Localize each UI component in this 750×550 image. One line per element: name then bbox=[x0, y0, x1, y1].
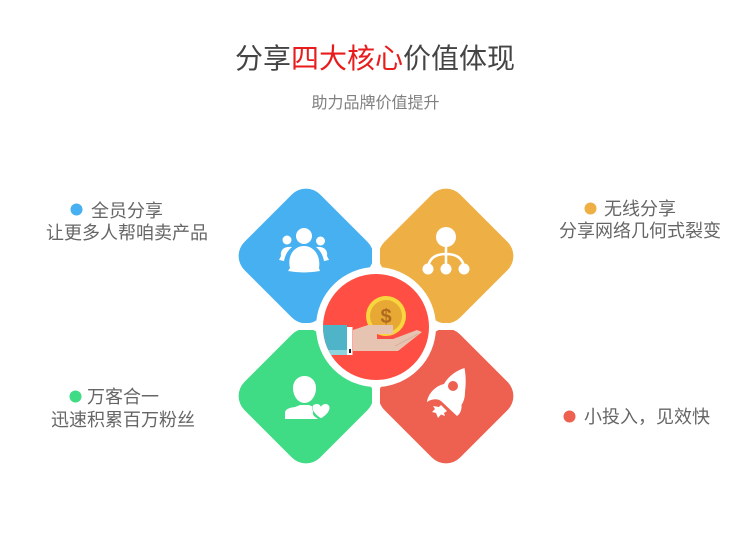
label: wireless sharing bbox=[559, 199, 721, 241]
label: fans bbox=[51, 387, 195, 430]
panel: blue diamond bbox=[238, 188, 372, 323]
label: all-staff sharing: 全员分享 bbox=[91, 201, 163, 221]
panel: green diamond bbox=[238, 330, 372, 464]
label: all-staff sharing: 让更多人帮咱卖产品 bbox=[46, 223, 208, 243]
icon: rocket bbox=[427, 368, 466, 418]
icon: network tree bbox=[422, 227, 470, 274]
label: wireless sharing: 分享网络几何式裂变 bbox=[559, 221, 721, 241]
panel: orange diamond bbox=[380, 188, 514, 323]
title: 分享四大核心价值体现 bbox=[235, 43, 515, 74]
label: fans: 万客合一 bbox=[87, 387, 159, 407]
label: wireless sharing: 无线分享 bbox=[604, 199, 676, 219]
icon: person with heart bbox=[285, 376, 330, 419]
icon: rocket window bbox=[448, 381, 458, 391]
label: fans: 迅速积累百万粉丝 bbox=[51, 410, 195, 430]
label: low investment: 小投入，见效快 bbox=[584, 407, 710, 427]
icon: gold coin: $ bbox=[380, 306, 392, 328]
panel: red diamond bbox=[380, 330, 514, 464]
subtitle: 助力品牌价值提升 bbox=[311, 94, 440, 112]
center badge bbox=[310, 267, 436, 387]
label: all-staff sharing bbox=[46, 201, 208, 243]
icon: hand with sleeve bbox=[323, 325, 422, 355]
icon: people group bbox=[279, 228, 329, 272]
